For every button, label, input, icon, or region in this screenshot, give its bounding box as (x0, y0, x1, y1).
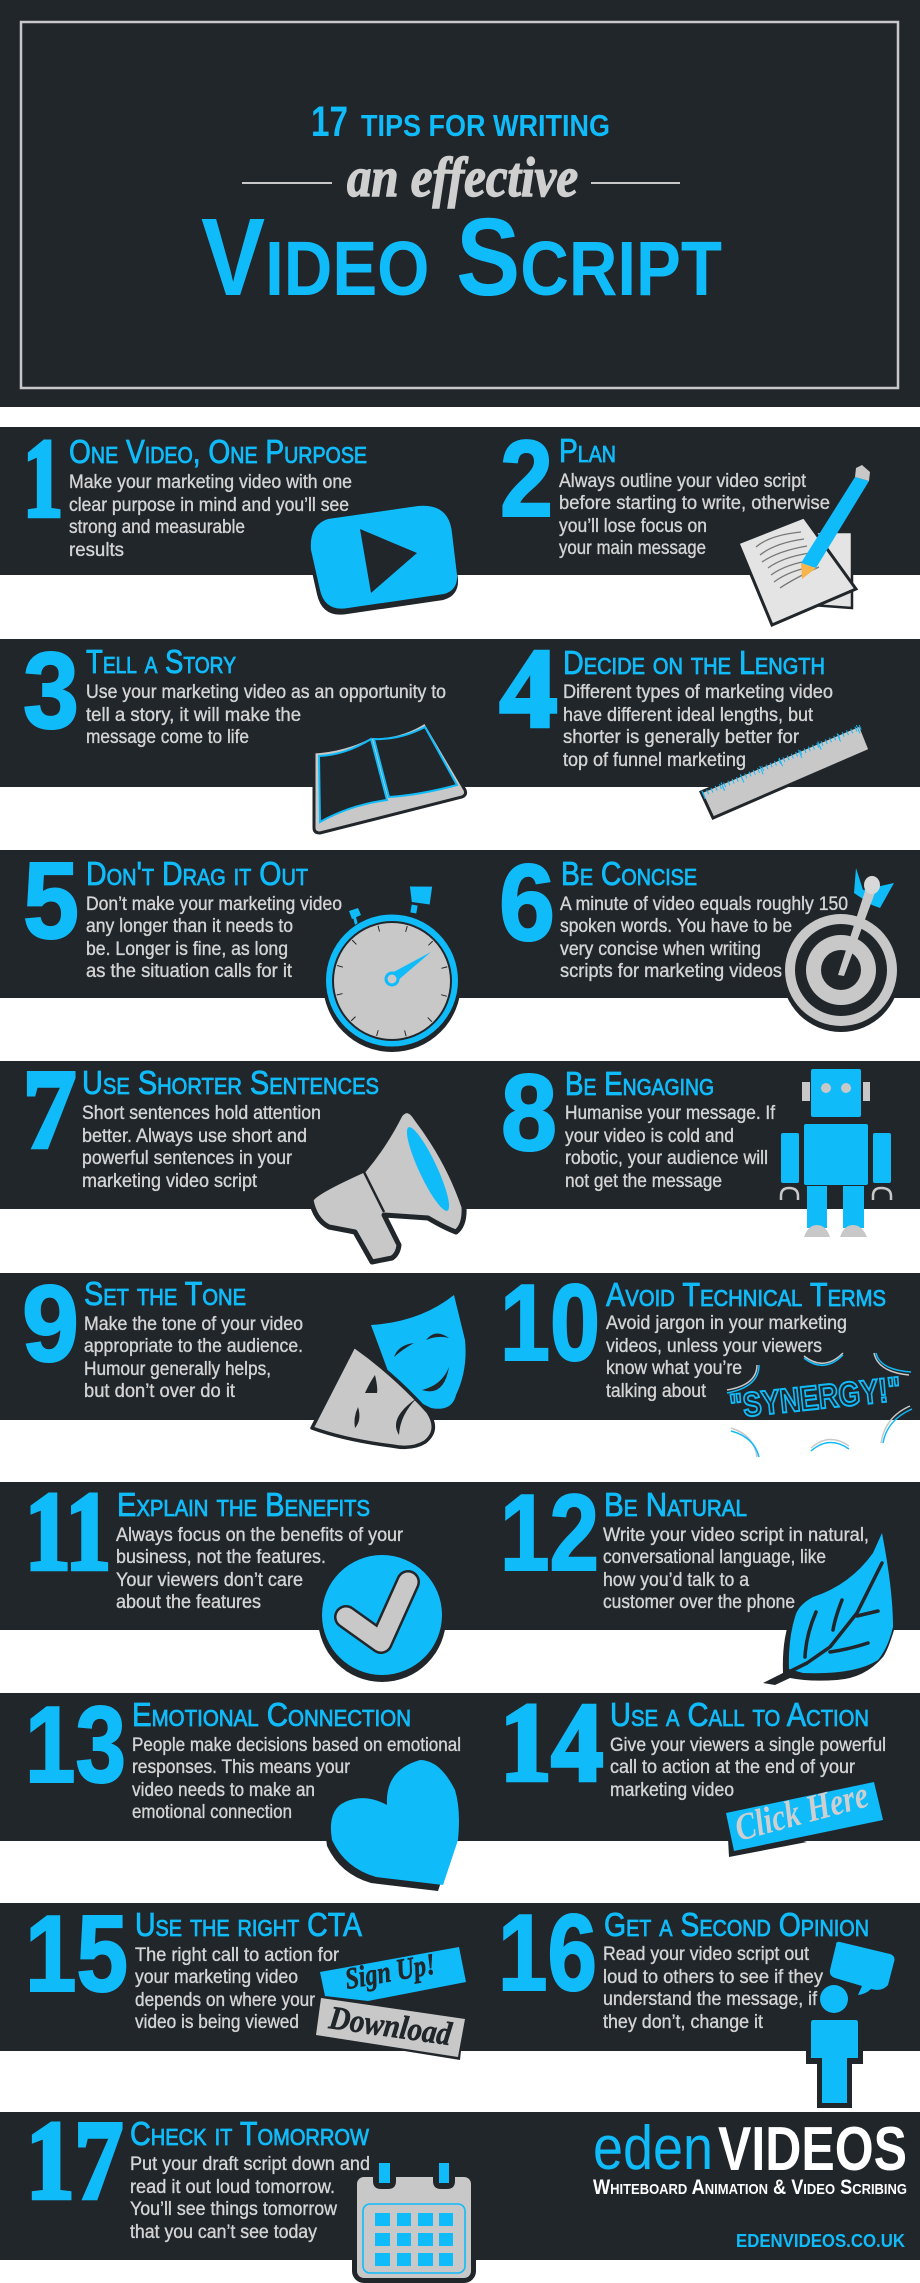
body text: People make decisions based on emotional (132, 1735, 461, 1756)
title: Explain the Benefits (117, 1486, 370, 1523)
body text (603, 1525, 869, 1613)
title: Be Concise (561, 855, 697, 892)
title: Avoid Technical Terms (606, 1276, 886, 1313)
body text (69, 472, 352, 561)
body text (559, 471, 830, 559)
panel: row 1 band (0, 427, 920, 575)
panel: tip 9 (22, 1263, 466, 1447)
body text: very concise when writing (560, 939, 761, 960)
body text: how you’d talk to a (603, 1570, 749, 1591)
icon: heart (326, 1760, 459, 1891)
body text: Your viewers don’t care (116, 1570, 303, 1591)
number 5: 5 (23, 840, 79, 962)
heading: 17 tips for writing (311, 98, 610, 146)
title: Be Natural (604, 1486, 747, 1523)
panel: row 3 band (0, 850, 920, 998)
body text: your video is cold and (565, 1126, 734, 1147)
title: Plan (559, 432, 616, 469)
body text: business, not the features. (116, 1547, 326, 1568)
icon: target with arrow (782, 868, 900, 1032)
icon: calendar (352, 2163, 476, 2283)
body text: Humanise your message. If (565, 1103, 776, 1124)
number 2: 2 (500, 418, 553, 540)
body text: strong and measurable (69, 517, 245, 538)
panel: row 4 band (0, 1061, 920, 1209)
body text: top of funnel marketing (563, 750, 746, 771)
number 7: 7 (23, 1048, 76, 1172)
panel: row 5 band (0, 1273, 920, 1420)
body text: responses. This means your (132, 1757, 351, 1778)
body text (86, 894, 342, 982)
icon: sign up button: Sign Up! (342, 1948, 438, 1996)
body text: you’ll lose focus on (559, 516, 707, 537)
heading: 17 tips for writing: 17 (311, 98, 348, 146)
icon: stopwatch (323, 884, 461, 1052)
title: Use a Call to Action (610, 1696, 869, 1733)
panel: row 6 band (0, 1482, 920, 1630)
body text: Write your video script in natural, (603, 1525, 869, 1546)
body text: Avoid jargon in your marketing (606, 1313, 847, 1334)
body text: scripts for marketing videos (560, 961, 782, 982)
body text: they don’t, change it (603, 2012, 764, 2033)
icon: download button: Download (326, 2000, 454, 2053)
body text: Read your video script out (603, 1944, 810, 1965)
number 14: 14 (500, 1681, 603, 1805)
number 6: 6 (499, 842, 555, 964)
body text: Don’t make your marketing video (86, 894, 342, 915)
body text: not get the message (565, 1171, 722, 1192)
number 16: 16 (498, 1892, 597, 2014)
body text: robotic, your audience will (565, 1148, 768, 1169)
body text: Humour generally helps, (84, 1359, 271, 1380)
body text (560, 894, 848, 982)
body text (610, 1735, 886, 1801)
number 1: 1 (23, 417, 63, 541)
body text: talking about (606, 1381, 707, 1402)
heading: an effective: an effective (347, 147, 578, 209)
body text (135, 1945, 340, 2033)
body text: before starting to write, otherwise (559, 493, 830, 514)
logo: eden videos (593, 2114, 907, 2199)
title: Emotional Connection (132, 1696, 411, 1733)
panel: tip 12 (500, 1472, 894, 1685)
body text (116, 1525, 404, 1613)
number 11: 11 (25, 1470, 111, 1594)
body text (563, 682, 833, 771)
panel: tip 4 (500, 627, 870, 818)
body text: have different ideal lengths, but (563, 705, 814, 726)
body text: The right call to action for (135, 1945, 340, 1966)
number 17: 17 (26, 2099, 123, 2223)
body text: better. Always use short and (82, 1126, 307, 1147)
header frame (21, 22, 898, 388)
panel: tip 6 (499, 842, 900, 1032)
body text: that you can’t see today (130, 2222, 317, 2243)
body text: tell a story, it will make the (86, 705, 301, 726)
body text (86, 682, 446, 748)
body text: read it out loud tomorrow. (130, 2177, 335, 2198)
body text: loud to others to see if they (603, 1967, 823, 1988)
panel: tip 5 (23, 840, 461, 1052)
title: Use Shorter Sentences (82, 1064, 379, 1101)
panel: row 2 band (0, 639, 920, 787)
body text: clear purpose in mind and you’ll see (69, 495, 349, 516)
body text: emotional connection (132, 1802, 292, 1823)
body text: Make your marketing video with one (69, 472, 352, 493)
number 13: 13 (25, 1684, 126, 1806)
body text: Short sentences hold attention (82, 1103, 321, 1124)
panel: tip 11 (25, 1470, 446, 1682)
body text: video needs to make an (132, 1780, 315, 1801)
title: Set the Tone (84, 1275, 246, 1312)
number 8: 8 (501, 1052, 557, 1174)
body text: Different types of marketing video (563, 682, 833, 703)
title: Check it Tomorrow (130, 2115, 369, 2152)
panel: tip 17 (26, 2099, 476, 2283)
panel: tip 7 (23, 1048, 464, 1262)
number 9: 9 (22, 1263, 79, 1385)
heading: video script: Video Script (201, 196, 722, 319)
panel: tip 10 (500, 1262, 912, 1457)
body text: shorter is generally better for (563, 727, 800, 748)
panel: tip 13 (25, 1684, 461, 1891)
panel: tip 15 (25, 1893, 466, 2060)
panel: tip 14 (500, 1681, 886, 1857)
body text: Always outline your video script (559, 471, 807, 492)
body text: understand the message, if (603, 1989, 818, 2010)
panel: tip 3 (23, 630, 466, 833)
body text: as the situation calls for it (86, 961, 293, 982)
body text: about the features (116, 1592, 261, 1613)
icon: open book (314, 722, 466, 833)
icon: person with speech bubble (806, 1942, 894, 2108)
body text: but don’t over do it (84, 1381, 236, 1402)
panel: row 8 band (0, 1903, 920, 2051)
body text: marketing video (610, 1780, 734, 1801)
body text: powerful sentences in your (82, 1148, 293, 1169)
number 3: 3 (23, 630, 79, 752)
panel: row 9 band (0, 2112, 920, 2260)
icon: sign up button (320, 1947, 466, 2001)
body text: conversational language, like (603, 1547, 826, 1568)
body text (82, 1103, 321, 1192)
body text: Put your draft script down and (130, 2154, 370, 2175)
body text: marketing video script (82, 1171, 258, 1192)
icon: synergy shout (727, 1353, 912, 1457)
number 4: 4 (500, 627, 557, 751)
body text: Give your viewers a single powerful (610, 1735, 886, 1756)
body text: Make the tone of your video (84, 1314, 303, 1335)
panel: tip 2 (500, 418, 870, 625)
number 10: 10 (500, 1262, 600, 1384)
title: Tell a Story (86, 643, 236, 680)
body text: videos, unless your viewers (606, 1336, 822, 1357)
title: Get a Second Opinion (604, 1906, 869, 1943)
body text: depends on where your (135, 1990, 316, 2011)
body text: be. Longer is fine, as long (86, 939, 288, 960)
number 15: 15 (25, 1893, 128, 2015)
body text: spoken words. You have to be (560, 916, 792, 937)
body text (132, 1735, 461, 1823)
icon: theatre masks (312, 1295, 466, 1447)
panel: tip 8 (501, 1052, 891, 1237)
body text (84, 1314, 303, 1402)
panel: tip 1 (23, 417, 457, 613)
number 12: 12 (500, 1472, 599, 1594)
body text: call to action at the end of your (610, 1757, 856, 1778)
body text (606, 1313, 847, 1402)
body text: appropriate to the audience. (84, 1336, 303, 1357)
panel: header (0, 0, 920, 407)
title: One Video, One Purpose (69, 433, 367, 470)
body text: You’ll see things tomorrow (130, 2199, 337, 2220)
icon: pencil and paper (738, 465, 870, 625)
body text: video is being viewed (135, 2012, 299, 2033)
icon: robot (781, 1069, 891, 1237)
icon: click here button: Click Here (730, 1774, 873, 1850)
panel: row 7 band (0, 1693, 920, 1841)
icon: ruler (701, 725, 870, 818)
body text: any longer than it needs to (86, 916, 293, 937)
title: Don't Drag it Out (86, 855, 308, 892)
title: Be Engaging (565, 1065, 714, 1102)
icon: play button (310, 506, 457, 613)
icon: megaphone (311, 1111, 464, 1262)
body text (130, 2154, 370, 2243)
body text (565, 1103, 776, 1192)
icon: check mark (318, 1554, 446, 1682)
body text: message come to life (86, 727, 249, 748)
body text: customer over the phone (603, 1592, 795, 1613)
body text: results (69, 540, 124, 561)
body text: Always focus on the benefits of your (116, 1525, 404, 1546)
body text: A minute of video equals roughly 150 (560, 894, 848, 915)
body text: your main message (559, 538, 706, 559)
logo: eden videos: eden (593, 2114, 713, 2183)
body text: know what you’re (606, 1358, 742, 1379)
body text: Use your marketing video as an opportunity to (86, 682, 446, 703)
website url: EDENVIDEOS.CO.UK (736, 2231, 905, 2251)
panel: tip 16 (498, 1892, 894, 2108)
title: Decide on the Length (563, 644, 825, 681)
body text: your marketing video (135, 1967, 298, 1988)
title: Use the right CTA (135, 1906, 362, 1943)
icon: leaf (763, 1530, 894, 1685)
body text (603, 1944, 823, 2033)
heading: 17 tips for writing: TIPS FOR WRITING (361, 108, 610, 143)
